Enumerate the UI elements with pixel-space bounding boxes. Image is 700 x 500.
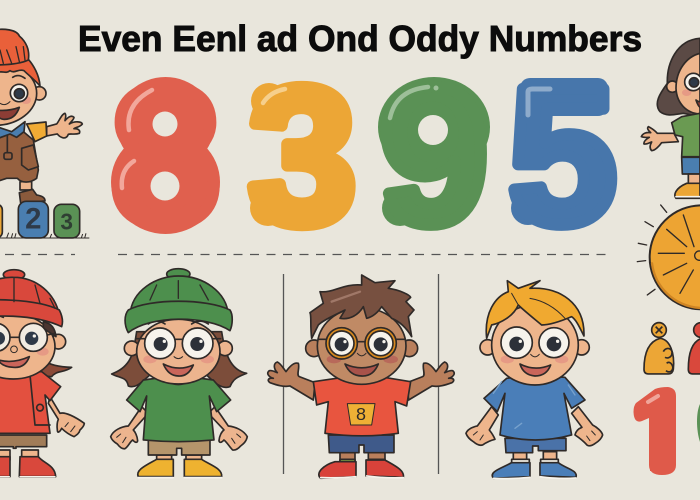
vertical line left [282, 274, 284, 474]
small red figure [688, 323, 700, 374]
big number 3: 3 [248, 47, 357, 265]
green number fragment [697, 404, 700, 442]
number blocks with grass [0, 201, 89, 238]
character: top-left red-haired child [0, 29, 82, 203]
number blocks with grass: 2 [25, 203, 41, 236]
character: boy with orange glasses and number 8 shirt [268, 275, 454, 478]
orange wheel [637, 205, 700, 309]
character: top-right girl [641, 38, 700, 198]
character: green hat child [111, 269, 247, 478]
title: Even Eenl ad Ond Oddy Numbers [78, 18, 642, 59]
small yellow figure [644, 323, 674, 374]
character: blond boy [466, 281, 603, 479]
big number 8: 8 [111, 47, 220, 265]
big number 5: 5 [508, 47, 617, 265]
big number 1 [634, 387, 676, 475]
big number 1: 1 [629, 370, 691, 495]
dashed divider [5, 254, 606, 256]
vertical line right [438, 274, 440, 474]
character: red hat child [0, 270, 84, 477]
number blocks with grass: 3 [60, 208, 73, 234]
big number 9: 9 [380, 47, 488, 265]
character: boy with orange glasses and number 8 shirt: 8 [356, 404, 366, 424]
